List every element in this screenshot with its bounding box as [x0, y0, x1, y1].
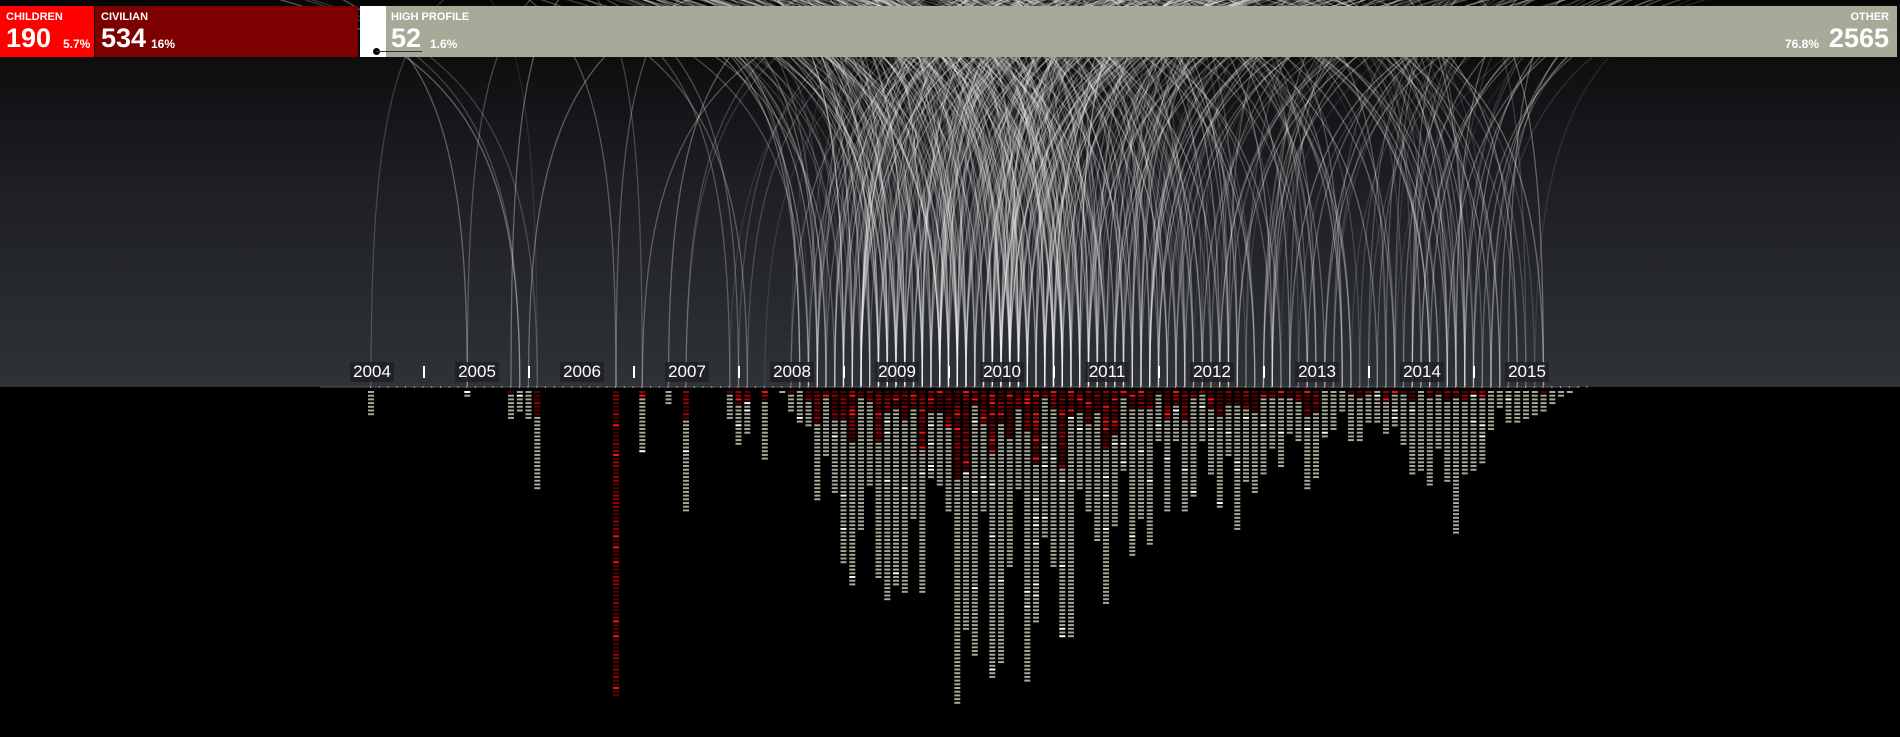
timeline axis with year labels: 2009 — [878, 362, 916, 381]
timeline axis with year labels: 2012 — [1193, 362, 1231, 381]
timeline axis with year labels: 2007 — [668, 362, 706, 381]
segment: high profile and other: 2565 — [1829, 23, 1889, 53]
timeline axis with year labels — [320, 362, 1588, 388]
timeline axis with year labels: 2008 — [773, 362, 811, 381]
segment: high profile and other: 1.6% — [430, 37, 457, 51]
segment: children: 5.7% — [63, 37, 90, 51]
timeline axis with year labels: 2004 — [353, 362, 391, 381]
top category bar — [0, 6, 1897, 57]
sky background — [0, 0, 1900, 387]
timeline axis with year labels: 2010 — [983, 362, 1021, 381]
segment: high profile and other: 52 — [391, 23, 421, 53]
segment: civilian: 16% — [151, 37, 175, 51]
timeline axis with year labels: 2013 — [1298, 362, 1336, 381]
segment: children — [0, 6, 94, 57]
segment: high profile marker — [360, 6, 386, 57]
timeline axis with year labels: 2014 — [1403, 362, 1441, 381]
timeline axis with year labels: 2011 — [1089, 362, 1125, 381]
timeline axis with year labels: 2006 — [563, 362, 601, 381]
segment: high profile and other — [386, 6, 1897, 57]
timeline axis with year labels: 2005 — [458, 362, 496, 381]
segment: civilian — [95, 6, 358, 57]
segment: high profile and other: 76.8% — [1785, 37, 1819, 51]
segment: civilian: 534 — [101, 23, 146, 53]
slider handle — [373, 48, 422, 55]
segment: children: CHILDREN — [6, 11, 63, 23]
segment: high profile and other: OTHER — [1850, 11, 1889, 23]
segment: high profile and other: HIGH PROFILE — [391, 11, 469, 23]
timeline axis with year labels: 2015 — [1508, 362, 1546, 381]
arcs: connection curves — [279, 0, 1706, 386]
segment: children: 190 — [6, 23, 51, 53]
monthly event columns — [368, 391, 1573, 704]
segment: civilian: CIVILIAN — [101, 11, 148, 23]
